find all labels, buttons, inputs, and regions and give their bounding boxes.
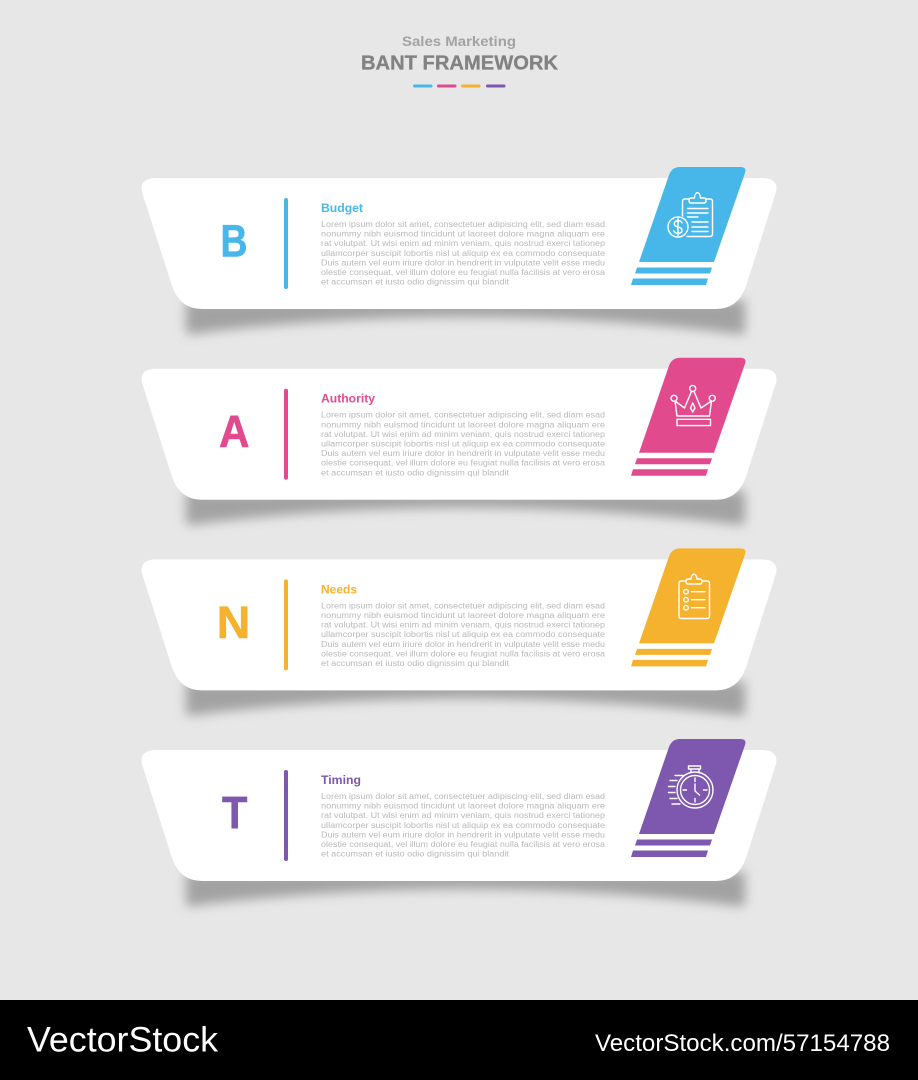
panel: Authority	[142, 358, 776, 525]
body text: Duis autem vel eum iriure dolor in hendrerit in vulputate velit esse medu	[321, 449, 605, 458]
body text: et accumsan et iusto odio dignissim qui blandit	[321, 468, 510, 477]
logo text: VectorStock	[27, 1020, 219, 1060]
panel: Budget	[142, 167, 776, 334]
card shadow	[186, 681, 745, 715]
body text: rat volutpat. Ut wisi enim ad minim veniam, quis nostrud exerci tationep	[321, 811, 606, 820]
tab	[639, 739, 745, 834]
body text: ullamcorper suscipit lobortis nisl ut aliquip ex ea commodo consequate	[321, 630, 606, 639]
stripes	[631, 649, 712, 666]
panel: Needs	[142, 548, 776, 715]
body text: rat volutpat. Ut wisi enim ad minim veniam, quis nostrud exerci tationep	[321, 430, 606, 439]
stripes	[631, 268, 712, 285]
subtitle: Sales Marketing	[402, 33, 516, 49]
body text: Lorem ipsum dolor sit amet, consectetuer adipiscing elit, sed diam esad	[321, 411, 605, 420]
body text: Lorem ipsum dolor sit amet, consectetuer adipiscing elit, sed diam esad	[321, 792, 605, 801]
body text: Duis autem vel eum iriure dolor in hendrerit in vulputate velit esse medu	[321, 830, 605, 839]
footer bar	[0, 1000, 918, 1080]
heading: Authority	[321, 392, 375, 406]
body text: Lorem ipsum dolor sit amet, consectetuer adipiscing elit, sed diam esad	[321, 601, 605, 610]
body text: rat volutpat. Ut wisi enim ad minim veniam, quis nostrud exerci tationep	[321, 239, 606, 248]
body text: nonummy nibh euismod tincidunt ut laoreet dolore magna aliquam ere	[321, 230, 606, 239]
letter A: A	[219, 406, 250, 457]
body text: et accumsan et iusto odio dignissim qui blandit	[321, 659, 510, 668]
divider	[284, 198, 288, 289]
icon: crown	[671, 386, 715, 426]
icon: clipboard with dollar coin	[668, 192, 712, 237]
divider	[284, 389, 288, 480]
card shadow	[186, 491, 745, 525]
panel: Timing	[142, 739, 776, 906]
letter T: T	[222, 788, 247, 838]
body text	[321, 220, 606, 287]
icon: checklist clipboard	[679, 574, 710, 618]
body text: Duis autem vel eum iriure dolor in hendrerit in vulputate velit esse medu	[321, 640, 605, 649]
body text	[321, 792, 606, 859]
body text: olestie consequat, vel illum dolore eu feugiat nulla facilisis at vero erosa	[321, 840, 606, 849]
heading: Needs	[321, 582, 357, 596]
body text: olestie consequat, vel illum dolore eu feugiat nulla facilisis at vero erosa	[321, 459, 606, 468]
body text: nonummy nibh euismod tincidunt ut laoreet dolore magna aliquam ere	[321, 802, 606, 811]
body text: Duis autem vel eum iriure dolor in hendrerit in vulputate velit esse medu	[321, 258, 605, 267]
stripes	[631, 840, 712, 857]
body text: rat volutpat. Ut wisi enim ad minim veniam, quis nostrud exerci tationep	[321, 621, 606, 630]
stock url: VectorStock.com/57154788	[595, 1030, 890, 1057]
colour dashes	[413, 84, 506, 88]
body text	[321, 601, 606, 668]
card	[142, 750, 776, 881]
card	[142, 369, 776, 500]
tab	[639, 358, 745, 453]
heading: Timing	[321, 773, 361, 787]
body text: olestie consequat, vel illum dolore eu feugiat nulla facilisis at vero erosa	[321, 268, 606, 277]
body text: ullamcorper suscipit lobortis nisl ut aliquip ex ea commodo consequate	[321, 440, 606, 448]
watermark footer	[0, 1000, 918, 1080]
body text: ullamcorper suscipit lobortis nisl ut aliquip ex ea commodo consequate	[321, 821, 606, 830]
card	[142, 178, 776, 309]
letter N: N	[217, 597, 250, 648]
body text: nonummy nibh euismod tincidunt ut laoreet dolore magna aliquam ere	[321, 420, 606, 429]
card shadow	[186, 872, 745, 906]
card	[142, 559, 776, 690]
body text: nonummy nibh euismod tincidunt ut laoreet dolore magna aliquam ere	[321, 611, 606, 620]
title block	[361, 33, 558, 88]
body text: et accumsan et iusto odio dignissim qui blandit	[321, 278, 510, 287]
body text: Lorem ipsum dolor sit amet, consectetuer adipiscing elit, sed diam esad	[321, 220, 605, 229]
tab	[639, 167, 745, 262]
divider	[284, 579, 288, 670]
card shadow	[186, 300, 745, 334]
letter B: B	[220, 216, 248, 266]
divider	[284, 770, 288, 861]
body text: et accumsan et iusto odio dignissim qui blandit	[321, 850, 510, 859]
stripes	[631, 458, 712, 476]
body text: olestie consequat, vel illum dolore eu feugiat nulla facilisis at vero erosa	[321, 649, 606, 658]
body text	[321, 411, 606, 477]
title: BANT FRAMEWORK	[361, 52, 558, 74]
heading: Budget	[321, 201, 363, 215]
icon: stopwatch	[668, 766, 713, 808]
tab	[639, 548, 745, 643]
body text: ullamcorper suscipit lobortis nisl ut aliquip ex ea commodo consequate	[321, 249, 606, 258]
